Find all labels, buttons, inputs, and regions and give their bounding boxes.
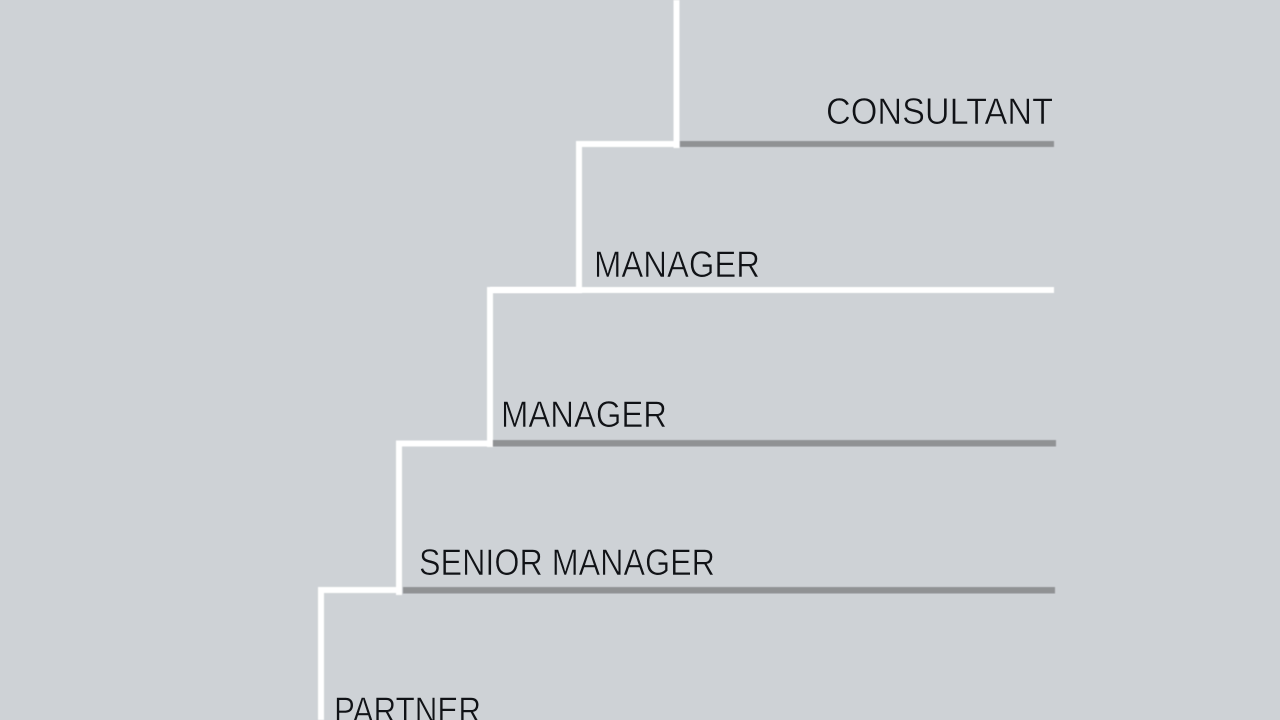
staircase white line: [321, 0, 680, 720]
label: senior manager: SENIOR MANAGER: [419, 542, 715, 583]
label: consultant: CONSULTANT: [826, 91, 1053, 132]
label: manager lower: MANAGER: [501, 394, 667, 435]
step line: senior manager: [403, 587, 1055, 594]
label: manager upper: MANAGER: [594, 244, 760, 285]
step line: manager lower: [493, 440, 1056, 446]
step line: manager upper: [490, 287, 1054, 293]
step line: consultant: [680, 141, 1054, 147]
